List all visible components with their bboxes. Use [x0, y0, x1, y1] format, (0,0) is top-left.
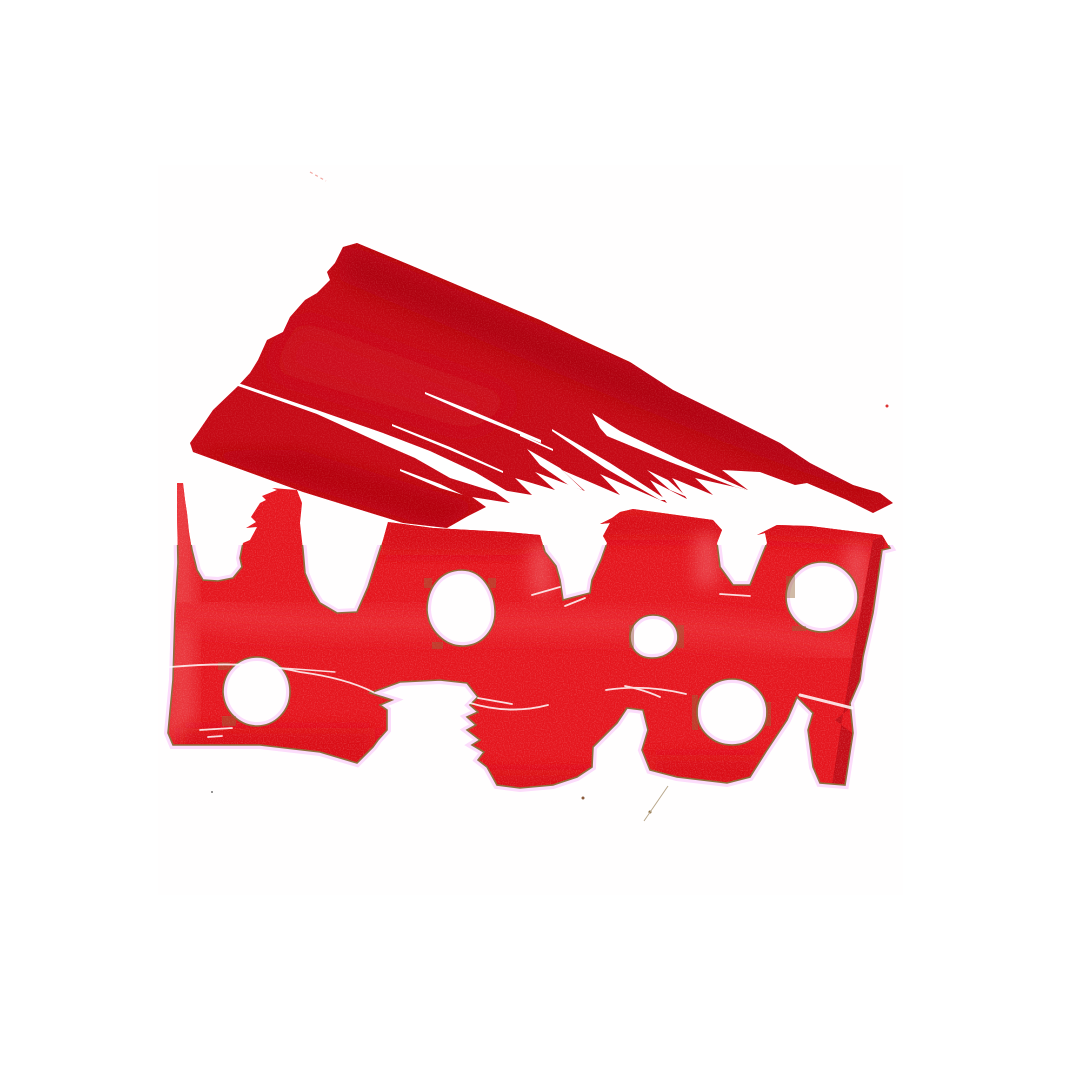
side paint fill	[168, 483, 890, 788]
pink halo around lower edges	[164, 545, 896, 792]
paper background	[158, 165, 903, 895]
illustration: red brush-painted cheese wedge	[164, 172, 896, 822]
cheese top face	[180, 235, 900, 535]
top paint fill	[190, 243, 893, 528]
cheese side face	[160, 480, 900, 800]
top brush streaks	[238, 383, 748, 500]
olive edge staining	[167, 545, 892, 789]
paint specks	[211, 172, 888, 821]
top shading and texture	[180, 235, 900, 535]
side shading and texture	[160, 480, 900, 800]
side brush streaks	[170, 587, 852, 737]
olive blotches around holes	[218, 576, 806, 730]
